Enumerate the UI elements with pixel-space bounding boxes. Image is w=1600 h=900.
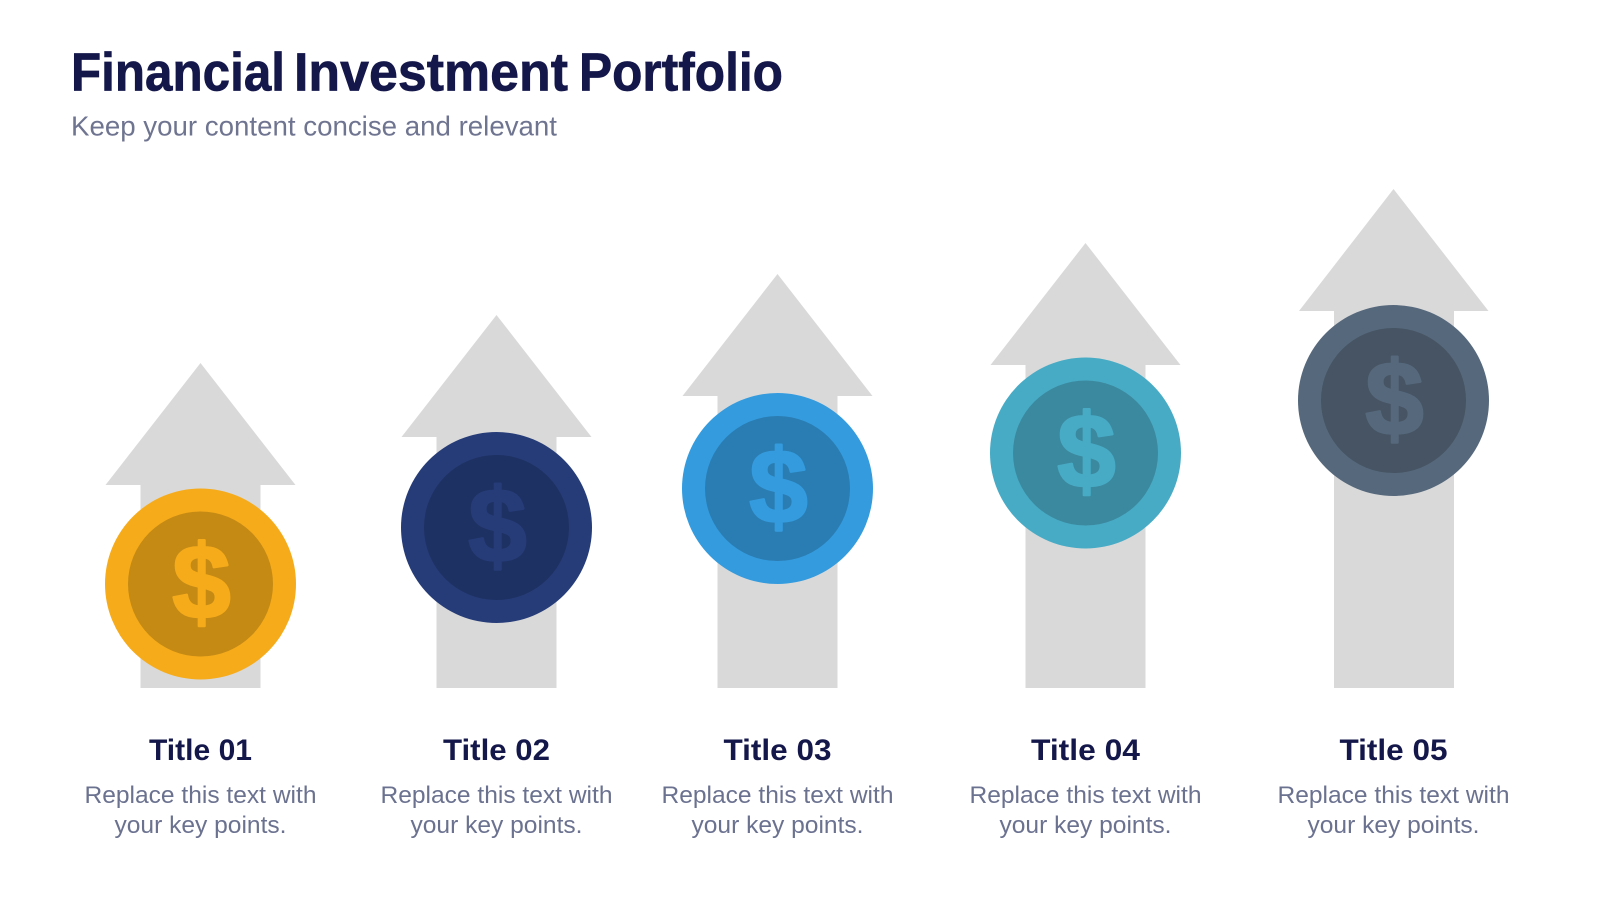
icon: coin 01: $ — [172, 524, 231, 641]
panel: item 04 — [970, 243, 1202, 839]
panel: item 03 — [662, 274, 894, 839]
icon: coin 04: $ — [1057, 393, 1116, 510]
title: Investment — [294, 42, 568, 102]
panel: item 05 — [1278, 189, 1510, 839]
text block 03: your key points. — [692, 812, 864, 839]
text block 01: Replace this text with — [84, 782, 316, 809]
arrow 04 — [990, 243, 1180, 688]
heading 03: Title 03 — [724, 734, 832, 767]
text block 05: your key points. — [1308, 812, 1480, 839]
panel: item 02 — [380, 315, 612, 839]
arrow 01 — [106, 363, 296, 688]
text block 05 — [1278, 782, 1510, 839]
icon: coin 05: $ — [1365, 340, 1424, 458]
icon: coin 04 — [990, 358, 1181, 548]
text block 05: Replace this text with — [1278, 782, 1510, 809]
text block 01 — [84, 782, 316, 839]
heading 05: Title 05 — [1340, 734, 1448, 767]
arrow 03 — [682, 274, 872, 688]
heading 04: Title 04 — [1031, 734, 1140, 767]
text block 03 — [662, 782, 894, 839]
text block 04 — [970, 782, 1202, 839]
icon: coin 03 — [682, 393, 873, 584]
icon: coin 01 — [105, 488, 296, 680]
heading 02: Title 02 — [443, 734, 550, 767]
subtitle: Keep your content concise and relevant — [71, 110, 557, 142]
text block 03: Replace this text with — [662, 782, 894, 809]
text block 04: Replace this text with — [970, 782, 1202, 809]
text block 02 — [380, 782, 612, 839]
panel: item 01 — [84, 363, 316, 839]
title: Financial — [71, 42, 285, 102]
icon: coin 05 — [1298, 305, 1489, 496]
arrow 02 — [402, 315, 592, 688]
text block 02: Replace this text with — [380, 782, 612, 809]
arrow 05 — [1299, 189, 1488, 688]
icon: coin 02: $ — [468, 468, 527, 584]
text block 01: your key points. — [114, 812, 286, 839]
icon: coin 03: $ — [749, 428, 808, 546]
title: Portfolio — [579, 42, 783, 102]
text block 02: your key points. — [410, 812, 582, 839]
text block 04: your key points. — [1000, 812, 1172, 839]
heading 01: Title 01 — [149, 734, 252, 767]
icon: coin 02 — [401, 432, 592, 623]
title — [71, 42, 783, 102]
